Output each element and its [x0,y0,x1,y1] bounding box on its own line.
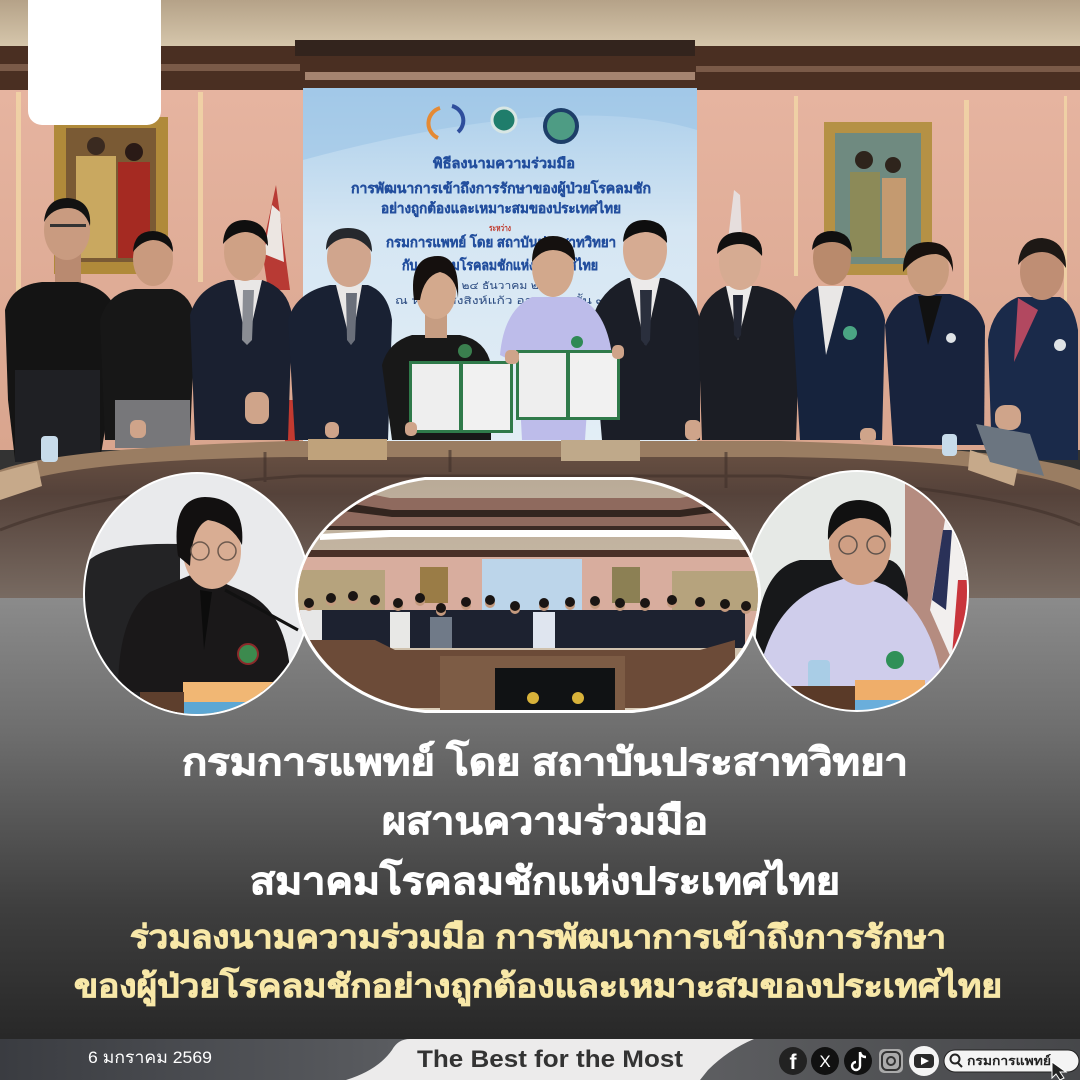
desk sign [183,682,273,714]
wall [295,557,761,647]
wall [0,90,1080,450]
badge [238,644,258,664]
subheadline: ร่วมลงนามความร่วมมือ การพัฒนาการเข้าถึงการรักษา [130,919,946,955]
desk sign [855,680,925,702]
banner heading: กับ สมาคมโรคลมชักแห่งประเทศไทย [402,256,598,273]
date: 6 มกราคม 2569 [88,1048,212,1067]
portrait left [54,117,168,274]
crowd [300,610,745,648]
center photo: wide room view [295,476,762,716]
person 9 [793,231,885,440]
U-shaped table [310,640,735,708]
icon: X [811,1047,839,1075]
ceiling [0,0,1080,50]
banner heading: พิธีลงนามความร่วมมือ [433,155,575,171]
jacket [118,572,290,692]
icon: instagram [879,1049,903,1073]
subheadline [74,919,1002,1007]
ceiling beams [0,40,1080,90]
circle photo: speaker woman [80,470,315,720]
icon: X: X [819,1052,831,1071]
footer slogan band [346,1039,754,1080]
portrait right [824,122,932,275]
shirt [758,575,942,700]
head [829,518,891,585]
table top edge [0,441,1080,490]
headline [182,739,908,903]
person 2 [100,231,195,448]
person 11 [988,238,1078,460]
dark gradient overlay [0,598,1080,1043]
signed document left [409,361,513,433]
wall panels [16,92,1067,312]
icon: facebook: f [790,1051,798,1074]
icon: tiktok [844,1047,872,1075]
chair [85,544,180,720]
head [184,520,241,589]
banner heading: อย่างถูกต้องและเหมาะสมของประเทศไทย [381,199,621,217]
quilted panels [295,570,385,610]
person 3 [190,220,292,440]
banner heading: กรมการแพทย์ โดย สถาบันประสาทวิทยา [386,233,616,250]
subheadline: ของผู้ป่วยโรคลมชักอย่างถูกต้องและเหมาะสมของประเทศไทย [74,967,1002,1007]
headline: ผสานความร่วมมือ [382,801,708,843]
table wood bands [0,450,1080,530]
banner heading: ระหว่าง [489,223,511,233]
hands [130,345,1021,443]
flowers [527,692,539,704]
icon: cursor [1052,1062,1066,1080]
ceiling beams [326,494,732,530]
signed document right [516,350,620,420]
main group photo [0,0,1080,610]
banner date lines: ณ ห้อง แสงสิงห์แก้ว อาคาร ๑ ชั้น ๓ [395,293,605,307]
person 6 [500,236,612,440]
person 4 [288,228,392,440]
water bottle [808,660,830,686]
crowd hair [304,591,751,613]
person 10 [885,242,985,445]
footer bar [0,1039,1080,1080]
glasses [191,542,236,560]
person 1 [5,198,116,462]
laptop [976,424,1044,476]
icon: youtube [909,1046,939,1076]
thai flag [930,520,968,660]
search pill [944,1050,1079,1080]
microphone [225,590,298,630]
monitor [495,668,615,712]
banner date lines: วันที่ ๒๔ ธันวาคม ๒๕๖๘ [435,278,565,292]
banner [482,559,582,610]
crowd faces [304,598,751,616]
slogan: The Best for the Most [417,1046,683,1073]
banner date lines [395,278,605,307]
icon: facebook [779,1047,807,1075]
water bottles [41,434,957,462]
portraits [420,567,448,603]
headline: กรมการแพทย์ โดย สถาบันประสาทวิทยา [182,739,908,784]
banner heading [351,155,651,273]
name plates [0,439,1018,500]
banner logos [428,106,577,142]
person 5 [382,256,491,440]
thai flags [262,185,742,444]
top-left white logo tab [28,0,161,125]
conference table [0,444,1080,610]
circle photo: man in lavender shirt [745,470,970,715]
banner heading: การพัฒนาการเข้าถึงการรักษาของผู้ป่วยโรคลมชัก [351,179,651,197]
person 8 [698,232,800,440]
banner [303,88,697,443]
headline: สมาคมโรคลมชักแห่งประเทศไทย [250,858,840,903]
search pill: กรมการแพทย์ [967,1054,1051,1068]
person 7 [592,220,700,440]
chair [755,560,908,660]
